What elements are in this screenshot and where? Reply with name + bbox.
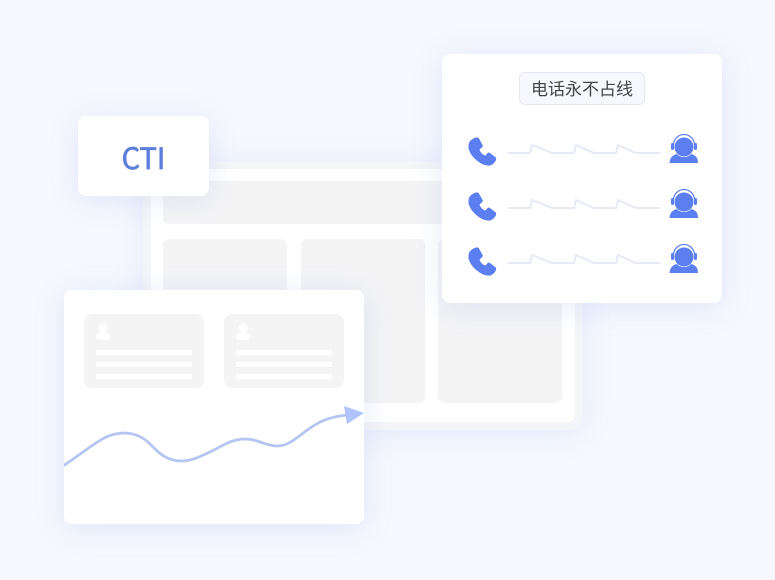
dashboard column 1 xyxy=(163,239,287,403)
CTI text: CTI xyxy=(122,136,165,178)
trend arrow chart xyxy=(64,406,364,467)
dashboard inner panel xyxy=(151,169,575,422)
dashboard window xyxy=(143,161,583,430)
text lines 1 xyxy=(96,350,192,379)
agent card 1 xyxy=(84,314,204,388)
row 3 xyxy=(469,244,698,275)
row 1 xyxy=(469,134,698,165)
CTI label card xyxy=(78,116,209,196)
avatar 1 xyxy=(96,324,110,340)
heading pill xyxy=(519,72,645,105)
agent card 2 xyxy=(224,314,344,388)
row 2 xyxy=(469,190,698,220)
dashboard top bar xyxy=(163,181,562,224)
text lines 2 xyxy=(236,350,332,379)
dashboard column 2 xyxy=(301,239,425,403)
dashboard column 3 xyxy=(438,239,562,403)
line connection rows xyxy=(468,134,698,276)
avatar 2 xyxy=(236,324,250,340)
panel: always-on phone lines xyxy=(442,54,722,303)
panel: agents and trend xyxy=(64,290,364,524)
heading pill: 电话永不占线 xyxy=(531,80,633,99)
